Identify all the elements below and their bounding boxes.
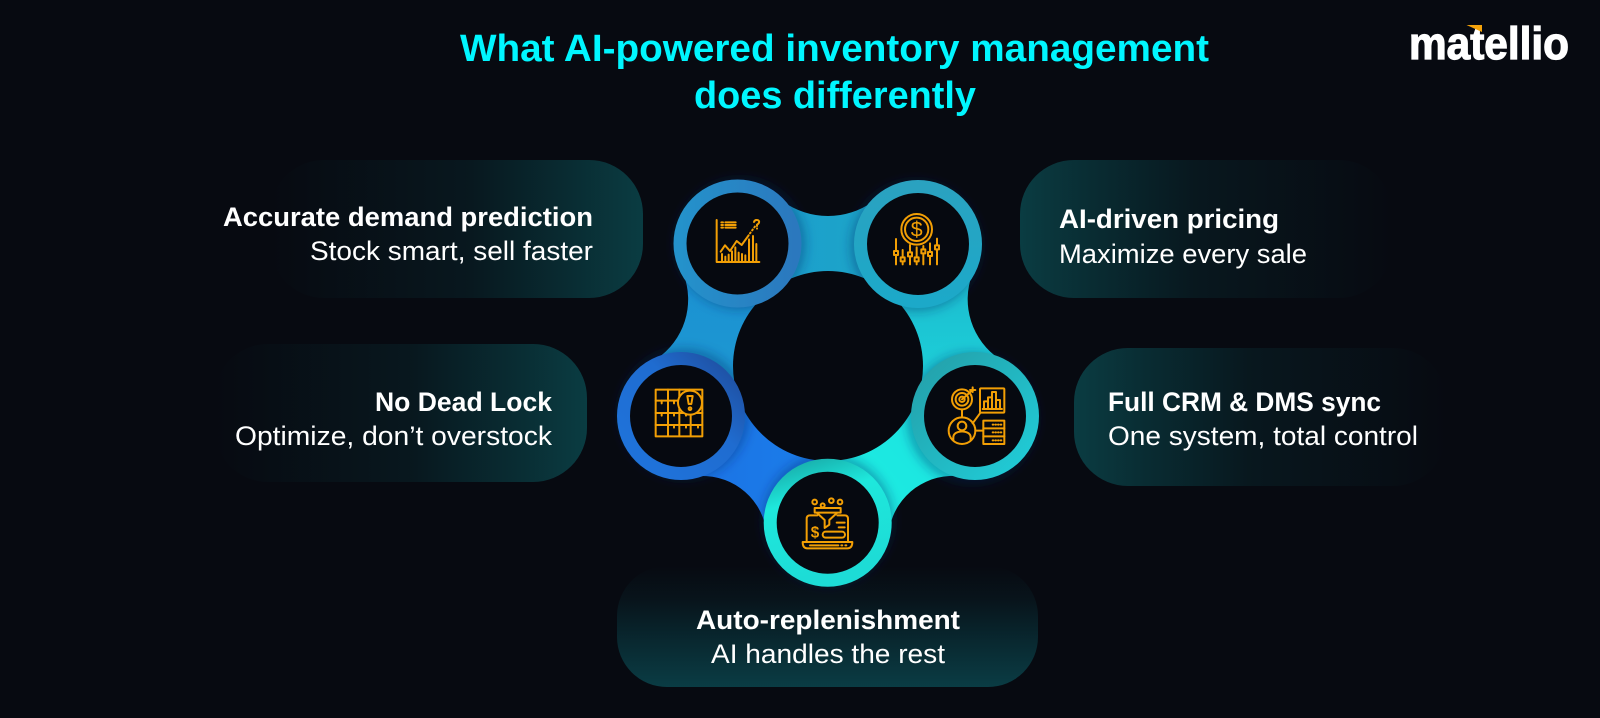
connector: top: [738, 202, 918, 366]
connector: lower right: [828, 366, 975, 528]
ring: replenishment: [770, 465, 885, 580]
icon: dollar sliders: $: [911, 218, 923, 242]
connector: upper right: [828, 244, 1000, 416]
ring: pricing: [860, 186, 976, 302]
ring shadows: [618, 178, 1038, 586]
panel: no dead lock: Optimize, don’t overstock: [235, 421, 553, 451]
panel: auto-replenishment: Auto-replenishment: [696, 605, 960, 635]
connector: lower left: [681, 366, 828, 528]
icon: dollar sliders: [894, 214, 939, 264]
panel: no dead lock: [214, 344, 587, 482]
icon: funnel laptop: [803, 498, 852, 548]
icon: stock grid alert: [656, 390, 702, 436]
panel: full crm and dms sync: Full CRM & DMS sync: [1108, 387, 1381, 417]
panel: auto-replenishment: AI handles the rest: [711, 639, 946, 669]
icon: crm network: [949, 387, 1004, 444]
panel: full crm and dms sync: One system, total control: [1108, 421, 1418, 451]
icon: funnel laptop: $: [811, 524, 820, 541]
panel: ai-driven pricing: AI-driven pricing: [1059, 204, 1279, 234]
title: [460, 28, 1209, 117]
title: does differently: [694, 75, 976, 117]
panel: ai-driven pricing: [1020, 160, 1393, 298]
panel: accurate demand prediction: Accurate demand prediction: [223, 202, 593, 232]
panel: no dead lock: No Dead Lock: [375, 387, 553, 417]
centre hole: [733, 271, 923, 461]
panel: ai-driven pricing: Maximize every sale: [1059, 239, 1307, 269]
ring: crm sync: [918, 358, 1032, 474]
icon: demand chart: [717, 220, 759, 262]
panel: auto-replenishment: [617, 566, 1038, 687]
title: What AI-powered inventory management: [460, 28, 1209, 70]
logo: matellio: matellio: [1409, 18, 1569, 69]
connector: upper left: [656, 244, 828, 416]
panel: accurate demand prediction: Stock smart, sell faster: [310, 236, 593, 266]
ring: demand prediction: [680, 186, 795, 301]
panel: full crm and dms sync: [1074, 348, 1447, 486]
ring: dead lock: [624, 358, 738, 474]
panel: accurate demand prediction: [223, 160, 643, 298]
central ring diagram: [618, 178, 1038, 586]
